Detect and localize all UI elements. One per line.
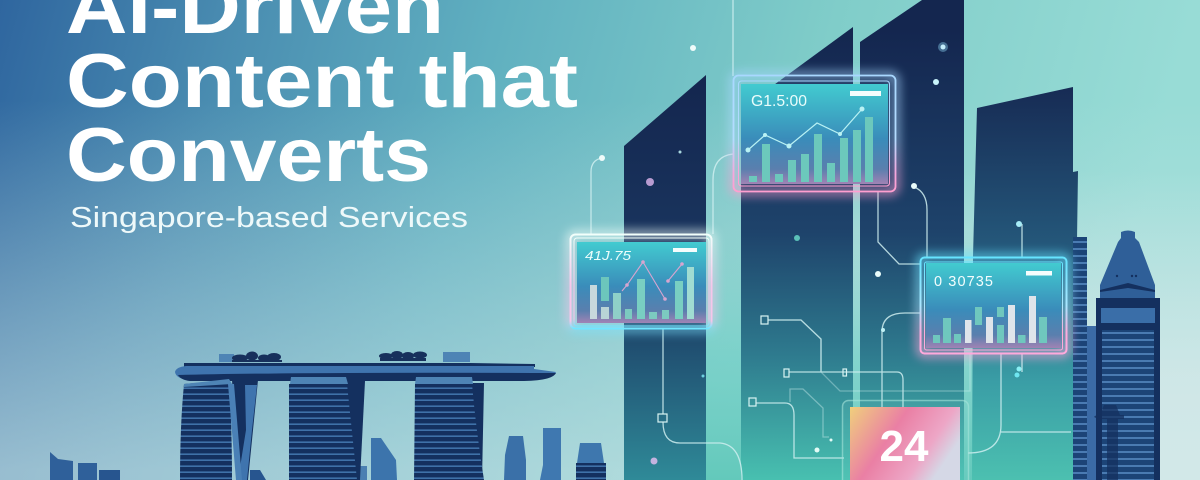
circuit lines [591,0,1071,480]
bars [749,117,873,182]
dashboard card: top: G1.5:00 [751,93,807,110]
glass building B [741,27,853,480]
glass building D [972,87,1080,480]
dashboard card: left: 41J.75 [585,248,632,263]
glass building C [860,0,964,480]
rooftop blocks and trees [219,351,470,362]
bars [933,296,1047,343]
dashboard card: left [570,234,712,329]
teal gaps between towers [706,230,973,480]
dashboard card: right [920,257,1067,354]
trend line [746,106,864,152]
subtitle: Singapore-based Services [70,202,468,234]
skyline: distant left buildings [50,428,606,480]
dashboard card: right: 0 30735 [934,274,993,290]
title: Converts [66,113,431,198]
dashboard card: top [733,75,896,192]
sky deck [175,363,556,381]
number tile: 24 [880,422,929,471]
tower 2 [289,377,365,480]
bars [590,267,694,319]
trend line [622,260,684,301]
slim striped tower [1073,237,1097,480]
glowing dots [599,42,1022,464]
spire tower [1094,230,1160,480]
title: Content that [66,39,578,124]
number tile [842,400,968,480]
Marina Bay Sands [175,351,556,480]
tower 1 [180,379,258,480]
circuit nodes [658,316,846,422]
tower 3 [414,377,484,480]
glass building A [624,75,706,480]
title [66,0,578,198]
